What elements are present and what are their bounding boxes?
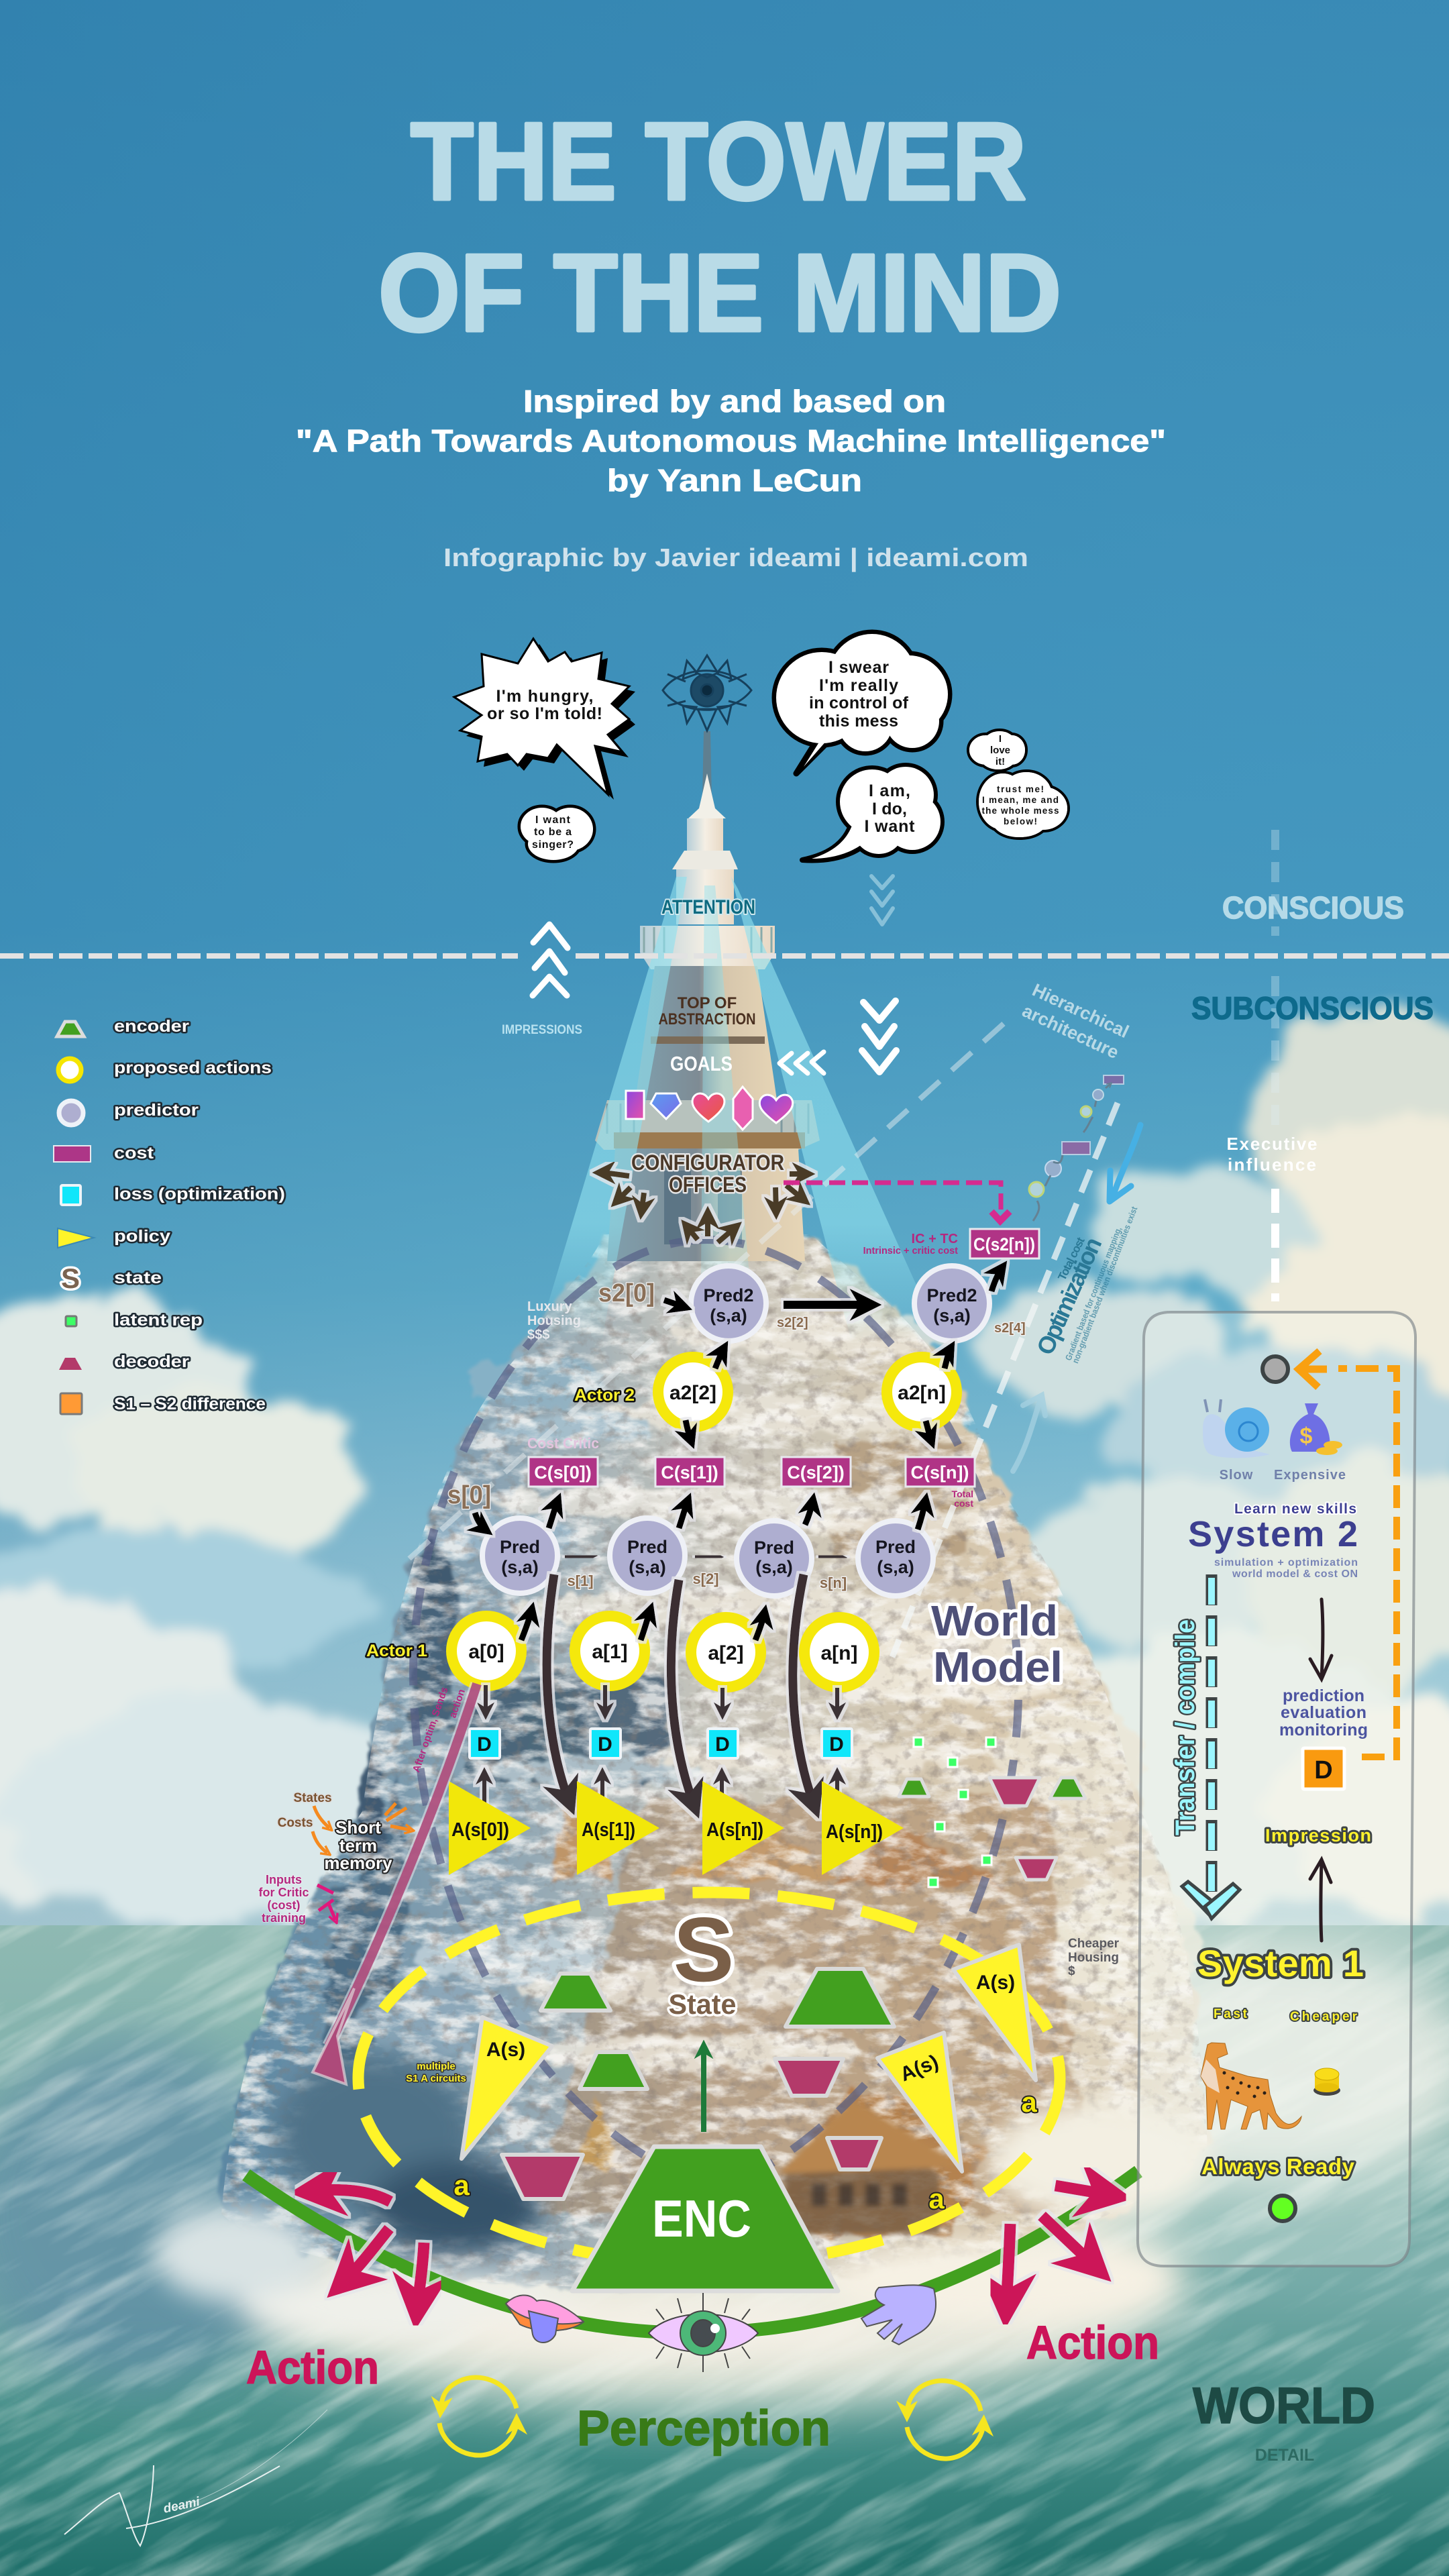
labels: s steps (567, 1570, 847, 1591)
panel: snail icon (1203, 1399, 1270, 1458)
signature: deami (162, 2495, 201, 2516)
panel: System 2 heading: System 2 (1188, 1514, 1358, 1554)
labels: s2 steps: s2[2] (777, 1316, 808, 1330)
predictor: Pred2 right: Pred2 (926, 1285, 977, 1305)
speech bubble: I swear: this mess (819, 712, 898, 731)
actor row: a[2] (708, 1642, 744, 1664)
speech bubble: I love it: I (999, 733, 1002, 745)
panel: slow and expensive labels: Slow (1220, 1468, 1253, 1483)
legend: predictor (59, 1101, 199, 1125)
label: cheaper housing: $ (1068, 1964, 1075, 1978)
label: multiple S1 A circuits: S1 A circuits (406, 2073, 466, 2084)
speech bubble: hungry: I'm hungry, (496, 687, 593, 706)
credit line: Infographic by Javier ideami | ideami.com (443, 544, 1028, 572)
panel: money bag icon (1290, 1403, 1342, 1455)
label: cheaper housing: Housing (1068, 1951, 1119, 1965)
labels: floor housing: $$$ (527, 1328, 549, 1342)
labels: s2 steps (777, 1316, 1026, 1336)
label: after optim sends action: After optim, Sends (411, 1686, 450, 1774)
label: multiple S1 A circuits: multiple (417, 2061, 455, 2072)
title: OF THE MIND (378, 231, 1061, 354)
action labels a (453, 2086, 1037, 2214)
label: IC + TC (863, 1232, 958, 1256)
executive feedback pink dashed arrow (784, 1183, 1010, 1221)
label: Action left: Action (246, 2341, 379, 2394)
label: multiple S1 A circuits (406, 2061, 466, 2084)
panel: fast and cheaper labels: Cheaper (1290, 2010, 1358, 2024)
speech bubble: I swear: I'm really (819, 676, 898, 695)
predictor row: (s,a) (501, 1557, 539, 1577)
cost row (529, 1457, 975, 1487)
panel: always ready label: Always Ready (1201, 2154, 1355, 2179)
label: World Model: Model (933, 1643, 1063, 1691)
configurator offices label (631, 1150, 784, 1197)
pale upward arrow (1013, 1395, 1045, 1471)
speech bubble: I am, I do, I want (802, 765, 942, 861)
legend: encoder (57, 1017, 189, 1036)
legend (54, 1017, 285, 1414)
actor row: a[n] (821, 1642, 857, 1664)
panel: monitoring labels: evaluation (1281, 1703, 1366, 1722)
speech bubble: I love it: it! (996, 756, 1005, 767)
label: hierarchical architecture: Hierarchical (1029, 979, 1132, 1042)
labels: floor housing (527, 1299, 581, 1342)
label: inputs for critic training (258, 1873, 335, 1925)
legend: state (61, 1263, 162, 1294)
action labels a: a (1021, 2086, 1037, 2118)
short term memory group: memory (324, 1853, 392, 1873)
arrows: actors to losses (484, 1685, 837, 1805)
short term memory group: Costs (278, 1816, 313, 1830)
title: THE TOWER (411, 100, 1026, 223)
speech bubble: I swear: I swear (828, 658, 889, 677)
speech bubble: I love it: love (990, 745, 1010, 756)
policy A(s) right: A(s) (976, 1972, 1015, 1994)
predictor: Pred2 right: (s,a) (933, 1305, 971, 1326)
panel: fast and cheaper labels: Fast (1214, 2007, 1248, 2021)
speech bubble: hungry: or so I'm told! (487, 704, 602, 723)
panel: impression label: Impression (1265, 1825, 1371, 1845)
predictor row: (s,a) (877, 1557, 914, 1577)
speech bubble: I am, I do, I want: I am, (869, 782, 910, 800)
optimization label: Optimization (1031, 1233, 1107, 1359)
impressions label: IMPRESSIONS (502, 1023, 582, 1037)
goal gems (626, 1087, 793, 1130)
label: executive influence: influence (1228, 1155, 1316, 1175)
attention light cone (537, 877, 942, 1342)
panel: cheetah icon (1201, 2043, 1301, 2129)
world model dashed boundary (413, 1240, 1018, 2174)
legend: encoder: encoder (114, 1017, 189, 1036)
panel: system 2 description: simulation + optimization (1214, 1557, 1358, 1568)
panel: arrow down (1310, 1599, 1332, 1679)
label: World Model: World (931, 1597, 1058, 1645)
action arrows right (1006, 2186, 1110, 2306)
legend: S1-S2 difference (60, 1393, 266, 1414)
actor row: a[0] (468, 1641, 504, 1663)
policy row: A(s[n]) (706, 1819, 763, 1841)
label: IC + TC: Intrinsic + critic cost (863, 1246, 958, 1256)
arrows: level one (475, 1499, 926, 1640)
tower: rocky snow texture (201, 1234, 1221, 2334)
label: Actor 1: Actor 1 (366, 1642, 427, 1660)
labels: s steps: s[n] (820, 1574, 847, 1591)
cost: C(s2[n]): C(s2[n]) (973, 1234, 1035, 1254)
label: conscious: CONSCIOUS (1222, 890, 1404, 925)
labels: s steps: s[1] (567, 1572, 594, 1589)
panel: monitoring labels (1279, 1686, 1368, 1739)
speech bubble: singer: singer? (532, 839, 574, 851)
speech bubble: singer: to be a (534, 826, 572, 838)
panel: learn new skills: Learn new skills (1234, 1501, 1356, 1517)
policy A(s) left: A(s) (486, 2039, 525, 2061)
loss row D: D (829, 1733, 844, 1756)
policy row: A(s[n]) (826, 1821, 883, 1843)
legend: policy (58, 1227, 170, 1248)
label: executive influence (1226, 1134, 1318, 1175)
actor: a2[2] (658, 1357, 728, 1427)
optimization label: non-gradient based when discontinuities exist (1070, 1205, 1140, 1364)
label: cheaper housing (1068, 1937, 1120, 1978)
policy A(s) center (877, 2033, 962, 2171)
legend: predictor: predictor (114, 1101, 199, 1120)
after-optim diagonal arrow (313, 1684, 477, 2084)
arrows: step transitions (565, 1556, 841, 1558)
impression chevrons up (533, 924, 568, 996)
panel: always ready dot (1270, 2196, 1295, 2221)
legend: decoder: decoder (114, 1352, 189, 1371)
top of abstraction label: ABSTRACTION (659, 1010, 755, 1028)
label: subconscious: SUBCONSCIOUS (1191, 990, 1434, 1026)
labels: s steps: s[2] (692, 1570, 719, 1587)
predictor row: (s,a) (755, 1557, 793, 1577)
mini hierarchical chain (1029, 1075, 1124, 1221)
optimization label (1031, 1205, 1140, 1364)
legend: cost: cost (114, 1144, 154, 1163)
panel: orange arrow to attention (1299, 1351, 1397, 1757)
perception arc (246, 2171, 1138, 2333)
label: executive influence: Executive (1226, 1134, 1318, 1154)
label: after optim sends action: action (447, 1688, 468, 1719)
legend: latent rep: latent rep (114, 1311, 203, 1330)
loss row D: D (715, 1733, 730, 1756)
optimization label: Gradient based for continuous mapping, (1063, 1226, 1124, 1362)
loop arrows right (907, 2381, 983, 2459)
short term memory group (278, 1791, 411, 1873)
actor: a2[n] (887, 1357, 957, 1427)
predictor row (482, 1518, 933, 1596)
predictor row: Pred (627, 1537, 667, 1557)
encoder ENC (572, 2147, 838, 2291)
policy row: A(s[1]) (582, 1819, 635, 1841)
speech bubble: singer (519, 806, 594, 861)
configurator offices label: CONFIGURATOR (631, 1150, 784, 1175)
speech bubble: hungry (454, 639, 635, 800)
predictor row: Pred (500, 1537, 540, 1557)
subtitle: "A Path Towards Autonomous Machine Intelligence" (296, 423, 1166, 458)
panel: slow and expensive labels: Expensive (1274, 1468, 1346, 1483)
policy A(s) center: A(s) (897, 2051, 942, 2086)
label: inputs for critic training: Inputs (266, 1873, 302, 1886)
policy row: A(s[0]) (451, 1819, 509, 1841)
faint chevrons down (871, 876, 893, 924)
tower: lower snowy body (221, 1234, 1208, 2288)
actor: a2[2]: a2[2] (669, 1382, 716, 1404)
short term memory group: Short (335, 1817, 381, 1837)
legend: state: state (114, 1269, 162, 1287)
loss row D: D (477, 1733, 492, 1756)
legend: proposed actions (58, 1059, 272, 1081)
tower: foam and storm shadows at the base (154, 2053, 1214, 2352)
arrows: level two (664, 1267, 1003, 1442)
panel: transfer compile label: Transfer / compile (1171, 1619, 1200, 1835)
panel: slow and expensive labels (1220, 1468, 1346, 1483)
cost row: C(s[2]) (787, 1462, 845, 1483)
state symbol: S (674, 1898, 734, 2000)
label: hierarchical architecture (1019, 979, 1132, 1063)
state up arrow (701, 2047, 706, 2132)
speech bubble: I am, I do, I want: I do, (872, 800, 907, 818)
label: s2[0]: s2[0] (598, 1279, 655, 1307)
label: Total cost: cost (954, 1498, 973, 1509)
label: inputs for critic training: (cost) (267, 1898, 301, 1912)
speech bubble: trust me: below! (1004, 816, 1037, 826)
cost: C(s2[n]) (970, 1229, 1039, 1258)
panel: System 1 heading: System 1 (1197, 1942, 1364, 1984)
predictor: Pred2: Pred2 (703, 1285, 754, 1305)
predictor: Pred2 (691, 1266, 766, 1341)
state symbol: State (668, 1988, 737, 2020)
predictor row: Pred (754, 1538, 794, 1558)
perception label: Perception (577, 2400, 830, 2456)
loop arrows left (439, 2377, 517, 2455)
top of abstraction label (659, 994, 755, 1028)
chevrons down (862, 1001, 896, 1072)
label: Actor 2: Actor 2 (574, 1386, 635, 1405)
subtitle: by Yann LeCun (607, 463, 862, 498)
icon: lips and tongue (506, 2295, 584, 2343)
attention label: ATTENTION (661, 896, 755, 918)
labels: s2 steps: s2[4] (994, 1321, 1026, 1336)
icon: all-seeing eye (663, 655, 751, 731)
small encoders and decoders, right cluster (899, 1778, 1085, 1880)
panel: attention dot (1263, 1356, 1288, 1382)
speech bubble: trust me: the whole mess (982, 806, 1059, 816)
encoders in the circuit (541, 1969, 894, 2089)
legend: cost (54, 1144, 154, 1163)
panel: System 1 and System 2 (1138, 1312, 1415, 2266)
actor row (451, 1616, 874, 1687)
loss row D: D (598, 1733, 612, 1756)
panel: monitoring labels: prediction (1283, 1686, 1364, 1705)
panel: arrow up (1310, 1860, 1331, 1941)
panel: system 2 description (1214, 1557, 1358, 1580)
action arrows left (312, 2190, 424, 2308)
hierarchical dashed line (406, 1024, 1004, 1562)
label: World Model (931, 1597, 1063, 1691)
top of abstraction label: TOP OF (678, 994, 737, 1012)
tower: houses near the base (778, 2100, 966, 2234)
legend: proposed actions: proposed actions (114, 1059, 272, 1077)
horizon dashed line (0, 953, 1449, 959)
optimization label: Total cost (1055, 1235, 1087, 1283)
loss row D (470, 1729, 852, 1758)
configurator offices label: OFFICES (669, 1173, 747, 1197)
policy A(s) right (953, 1945, 1036, 2080)
actor row: a[1] (592, 1641, 628, 1663)
predictor: Pred2: (s,a) (710, 1305, 747, 1326)
tower: snow bands (356, 1315, 1201, 2070)
legend: decoder (59, 1352, 189, 1371)
label: Total cost: Total (952, 1489, 973, 1499)
label: IC + TC: IC + TC (912, 1232, 958, 1246)
predictor row: Pred (875, 1537, 916, 1557)
predictor row: (s,a) (629, 1557, 666, 1577)
latent representation squares (914, 1737, 996, 1887)
legend: latent rep (66, 1311, 203, 1330)
label: cheaper housing: Cheaper (1068, 1937, 1120, 1951)
label: Action right: Action (1026, 2316, 1159, 2369)
label: Cost Critic: Cost Critic (527, 1435, 599, 1452)
legend: loss (61, 1185, 285, 1205)
decoders in the circuit (502, 2059, 881, 2199)
encoder ENC: ENC (652, 2189, 751, 2248)
legend: state: S (61, 1263, 80, 1294)
icon: perception eye (649, 2293, 758, 2372)
cost row: C(s[n]) (911, 1462, 969, 1483)
policy row (449, 1781, 904, 1875)
big curved arrows pred to policy (547, 1574, 815, 1808)
label: DETAIL: DETAIL (1255, 2446, 1314, 2465)
actor: a2[n]: a2[n] (898, 1382, 946, 1404)
action labels a: a (928, 2183, 945, 2214)
label: inputs for critic training: training (262, 1911, 306, 1925)
panel: monitoring labels: monitoring (1279, 1721, 1368, 1739)
label: hierarchical architecture: architecture (1019, 1000, 1122, 1063)
speech bubble: I love it (968, 730, 1026, 771)
panel: D box (1303, 1748, 1344, 1789)
legend: loss: loss (optimization) (114, 1185, 285, 1203)
subtitle: Inspired by and based on (523, 384, 946, 419)
goals chevrons left (780, 1052, 824, 1073)
speech bubble: I am, I do, I want: I want (864, 817, 915, 836)
label: inputs for critic training: for Critic (258, 1886, 309, 1899)
action labels a: a (453, 2169, 470, 2201)
cost row: C(s[0]) (534, 1462, 592, 1483)
panel: money bag icon: $ (1300, 1424, 1313, 1449)
panel: fast and cheaper labels (1214, 2007, 1358, 2024)
label: s[0]: s[0] (447, 1481, 491, 1509)
policy triangles in the circuit (462, 1945, 1036, 2171)
short term memory group: States (293, 1791, 332, 1805)
subtitle (296, 384, 1166, 498)
policy A(s) left (462, 2017, 552, 2159)
short term memory group: term (339, 1835, 377, 1856)
speech bubble: singer: I want (535, 814, 571, 826)
panel: cyan transfer dashed arrow (1182, 1574, 1240, 1919)
legend: S1-S2 difference: S1 – S2 difference (114, 1395, 266, 1413)
labels: floor housing: Housing (527, 1313, 581, 1328)
configurator arrows (599, 1173, 808, 1242)
panel: D box: D (1314, 1756, 1333, 1784)
speech bubble: I swear: in control of (809, 694, 909, 712)
icon: hand (861, 2285, 936, 2345)
label: Total cost (952, 1489, 973, 1509)
labels: floor housing: Luxury (527, 1299, 573, 1314)
cost row: C(s[1]) (661, 1462, 718, 1483)
speech bubble: trust me: I mean, me and (982, 795, 1059, 805)
background: sea (0, 1925, 1449, 2576)
optimization blue arrow (1110, 1125, 1140, 1201)
predictor: Pred2 right (914, 1266, 989, 1341)
panel: system 2 description: world model & cost ON (1232, 1568, 1358, 1580)
label: WORLD: WORLD (1193, 2377, 1375, 2434)
signature (64, 2410, 327, 2546)
title (378, 100, 1061, 354)
speech bubble: trust me: trust me! (997, 784, 1044, 794)
panel: coins icon (1313, 2068, 1340, 2096)
background: clouds (0, 1013, 1449, 1925)
yellow dashed S1 circuit (358, 1892, 1060, 2264)
legend: policy: policy (114, 1227, 170, 1246)
tower: lighthouse shaft and balconies (595, 731, 820, 1261)
speech bubble: I swear (775, 633, 949, 773)
vertical dashed executive line (1271, 830, 1279, 1301)
speech bubble: trust me (977, 771, 1069, 839)
goals label: GOALS (670, 1052, 733, 1075)
optimization dashed line (892, 1103, 1118, 1657)
